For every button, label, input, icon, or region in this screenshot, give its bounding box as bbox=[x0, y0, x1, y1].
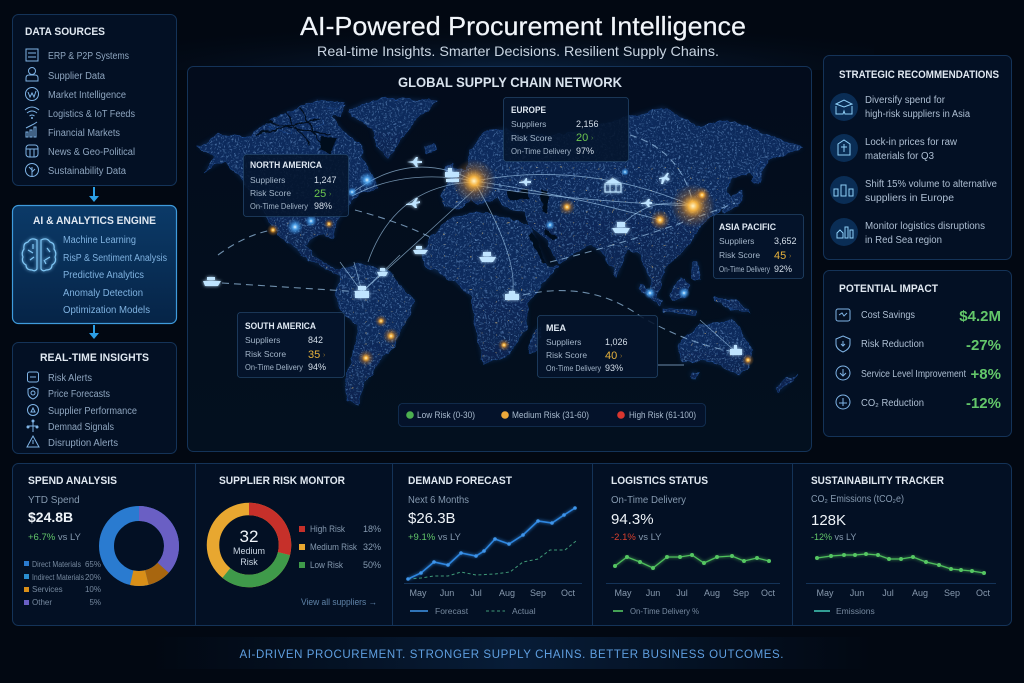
axis labels: Oct bbox=[976, 588, 990, 598]
callout: south america: 35 bbox=[308, 349, 320, 361]
list: engine capabilities: RisP & Sentiment Analysis bbox=[63, 253, 167, 264]
legend: risk levels: Low Risk (0-30) bbox=[417, 410, 475, 420]
callout: MEA: 40 bbox=[605, 350, 617, 362]
inland seas and channels bbox=[318, 136, 556, 262]
item: disruption alerts: Disruption Alerts bbox=[48, 438, 118, 449]
recommendation: lock-in: materials for Q3 bbox=[865, 151, 934, 162]
legend: risk breakdown: 32% bbox=[363, 542, 381, 552]
legend: spend categories: 20% bbox=[85, 573, 101, 582]
heading: insights: REAL-TIME INSIGHTS bbox=[40, 352, 149, 364]
callout: north america: 98% bbox=[314, 201, 332, 211]
chart: risk donut bbox=[213, 509, 285, 581]
callout: europe: EUROPE bbox=[511, 105, 546, 116]
item: news and geopolitical: News & Geo-Political bbox=[48, 147, 135, 158]
callout: south america: 842 bbox=[308, 335, 323, 345]
axis labels: May bbox=[409, 588, 427, 598]
link: view all suppliers: View all suppliers → bbox=[301, 597, 377, 607]
axis labels: Oct bbox=[561, 588, 575, 598]
card: demand forecast bbox=[404, 475, 582, 616]
callout: europe: Suppliers bbox=[511, 119, 546, 129]
callout: europe: 20 bbox=[576, 132, 588, 144]
panel: real-time insights bbox=[12, 342, 176, 454]
item: logistics and IoT: Logistics & IoT Feeds bbox=[48, 109, 135, 120]
callout: MEA: MEA bbox=[546, 323, 566, 334]
axis labels: Sep bbox=[944, 588, 960, 598]
axis labels: Aug bbox=[704, 588, 720, 598]
arrow: engine to insights bbox=[89, 325, 99, 339]
icon: brain bbox=[22, 239, 56, 271]
icon: warehouse bbox=[605, 178, 621, 192]
item: supplier data: Supplier Data bbox=[48, 71, 105, 82]
callout: asia pacific bbox=[714, 214, 804, 278]
card: spend analysis bbox=[24, 475, 172, 607]
item: price forecasts: Price Forecasts bbox=[48, 389, 110, 400]
callout: MEA: On-Time Delivery bbox=[546, 363, 602, 373]
axis labels bbox=[614, 588, 775, 598]
card: logistics status: -2.1% vs LY bbox=[611, 532, 662, 543]
item: logistics and IoT bbox=[25, 107, 135, 120]
card: demand forecast: Next 6 Months bbox=[408, 495, 469, 506]
card: sustainability tracker: -12% vs LY bbox=[811, 532, 856, 542]
axis labels: Jul bbox=[882, 588, 894, 598]
shipping and air routes bbox=[218, 135, 736, 352]
callout: asia pacific: Suppliers bbox=[719, 236, 754, 246]
callout: MEA: Risk Score bbox=[546, 350, 587, 360]
card: sustainability tracker: 128K bbox=[811, 512, 846, 529]
card: demand forecast: $26.3B bbox=[408, 510, 456, 527]
heading: recommendations: STRATEGIC RECOMMENDATIONS bbox=[839, 69, 999, 81]
metric: cost savings: $4.2M bbox=[959, 308, 1001, 325]
item: financial markets: Financial Markets bbox=[48, 128, 120, 139]
callout: north america: 1,247 bbox=[314, 175, 337, 185]
legend: emissions: Emissions bbox=[836, 606, 875, 616]
icons: ships and depots bbox=[203, 168, 742, 355]
item: market intelligence: Market Intelligence bbox=[48, 90, 126, 101]
item: price forecasts bbox=[28, 387, 110, 400]
item: demand signals bbox=[26, 420, 114, 433]
item: risk alerts bbox=[28, 372, 92, 384]
risk score label: Risk bbox=[240, 557, 258, 567]
callout: north america: NORTH AMERICA bbox=[250, 160, 322, 171]
metric: risk reduction bbox=[836, 336, 1001, 354]
chart: on-time delivery line bbox=[606, 553, 780, 584]
axis labels: Oct bbox=[761, 588, 775, 598]
callout: MEA bbox=[538, 316, 684, 378]
heading: impact: POTENTIAL IMPACT bbox=[839, 283, 938, 295]
card: logistics status: LOGISTICS STATUS bbox=[611, 475, 708, 487]
panel: global supply chain network bbox=[188, 66, 812, 452]
chart: emissions line bbox=[806, 552, 996, 584]
risk score label bbox=[233, 527, 265, 567]
legend: risk levels bbox=[398, 404, 706, 426]
item: news and geopolitical bbox=[26, 145, 135, 158]
legend: spend categories: Services bbox=[32, 585, 63, 594]
callout: south america bbox=[238, 312, 344, 378]
recommendation: monitor logistics: Monitor logistics disruptions bbox=[865, 221, 985, 232]
card: demand forecast: DEMAND FORECAST bbox=[408, 475, 512, 487]
item: risk alerts: Risk Alerts bbox=[48, 373, 92, 384]
panel: AI and analytics engine bbox=[12, 206, 176, 324]
heading: map title: GLOBAL SUPPLY CHAIN NETWORK bbox=[398, 74, 622, 90]
list: engine capabilities bbox=[63, 235, 167, 316]
panel: potential impact bbox=[824, 270, 1012, 436]
metric: service level improvement: Service Level Improvement bbox=[861, 369, 966, 380]
callout: asia pacific: › bbox=[789, 253, 792, 260]
legend: spend categories: 65% bbox=[85, 560, 101, 569]
metric: cost savings bbox=[836, 308, 1001, 325]
legend: spend categories: Direct Materials bbox=[32, 560, 81, 569]
legend: risk breakdown: 18% bbox=[363, 524, 381, 534]
callout: north america: Risk Score bbox=[250, 188, 291, 198]
subtitle: Real-time Insights. Smarter Decisions. Resilient Supply Chains. bbox=[317, 43, 719, 59]
recommendation: lock-in: Lock-in prices for raw bbox=[865, 137, 958, 148]
legend: spend categories bbox=[24, 560, 101, 607]
callout: south america: On-Time Delivery bbox=[245, 362, 304, 372]
card: demand forecast: +9.1% vs LY bbox=[408, 532, 462, 543]
axis labels: Aug bbox=[912, 588, 928, 598]
callout: north america: › bbox=[329, 191, 332, 198]
legend: logistics: On-Time Delivery % bbox=[630, 606, 699, 616]
legend: risk breakdown: High Risk bbox=[310, 524, 345, 534]
legend: risk levels: High Risk (61-100) bbox=[629, 410, 696, 420]
title bbox=[300, 11, 746, 59]
axis labels: Jun bbox=[646, 588, 660, 598]
metric: CO2 reduction bbox=[836, 395, 1001, 412]
icons: planes bbox=[406, 157, 670, 208]
card: spend analysis: YTD Spend bbox=[28, 495, 80, 506]
card: spend analysis: $24.8B bbox=[28, 509, 73, 525]
list: engine capabilities: Optimization Models bbox=[63, 305, 150, 316]
recommendation: diversify: high-risk suppliers in Asia bbox=[865, 109, 970, 120]
item: disruption alerts bbox=[27, 436, 118, 449]
metric: cost savings: Cost Savings bbox=[861, 310, 915, 321]
legend: risk breakdown: Low Risk bbox=[310, 560, 343, 570]
legend: risk levels: Medium Risk (31-60) bbox=[512, 410, 589, 420]
recommendation: diversify: Diversify spend for bbox=[865, 95, 946, 106]
callout: south america: 94% bbox=[308, 362, 326, 372]
axis labels: Jun bbox=[850, 588, 864, 598]
item: ERP: ERP & P2P Systems bbox=[48, 51, 129, 62]
recommendation: shift volume: suppliers in Europe bbox=[865, 193, 954, 204]
card: sustainability tracker: CO₂ Emissions (tCO₂e) bbox=[811, 494, 904, 505]
panel: strategic recommendations bbox=[824, 56, 1012, 260]
item: financial markets bbox=[26, 122, 120, 139]
callout: europe bbox=[504, 98, 628, 162]
recommendation: diversify bbox=[830, 93, 970, 121]
recommendation: monitor logistics: in Red Sea region bbox=[865, 235, 942, 246]
card: spend analysis: SPEND ANALYSIS bbox=[28, 475, 117, 487]
metric: CO2 reduction: -12% bbox=[966, 395, 1001, 412]
metric: service level improvement bbox=[836, 366, 1001, 383]
chart: demand line bbox=[404, 506, 582, 584]
metric: service level improvement: +8% bbox=[971, 366, 1001, 383]
card: supplier risk monitor: SUPPLIER RISK MONTOR bbox=[219, 475, 345, 487]
title: AI-Powered Procurement Intelligence bbox=[300, 11, 746, 41]
card: sustainability tracker: SUSTAINABILITY TRACKER bbox=[811, 475, 944, 487]
world map bbox=[196, 96, 803, 406]
metric: CO2 reduction: CO₂ Reduction bbox=[861, 398, 924, 409]
arrow: sources to engine bbox=[89, 187, 99, 202]
callout: south america: › bbox=[323, 352, 326, 359]
axis labels: Sep bbox=[530, 588, 546, 598]
axis labels: Jul bbox=[470, 588, 482, 598]
callout: asia pacific: ASIA PACIFIC bbox=[719, 222, 776, 233]
axis labels: Sep bbox=[733, 588, 749, 598]
callout: north america: 25 bbox=[314, 188, 326, 200]
item: market intelligence bbox=[26, 88, 126, 101]
callout: north america: Suppliers bbox=[250, 175, 285, 185]
risk score label: Medium bbox=[233, 546, 265, 556]
card: spend analysis: +6.7% vs LY bbox=[28, 532, 82, 543]
legend: demand bbox=[410, 606, 536, 616]
callout: asia pacific: On-Time Delivery bbox=[719, 264, 771, 274]
recommendation: lock-in bbox=[830, 134, 958, 162]
callout: asia pacific: 3,652 bbox=[774, 236, 797, 246]
callout: MEA: Suppliers bbox=[546, 337, 581, 347]
callout: south america: SOUTH AMERICA bbox=[245, 321, 316, 332]
legend: risk breakdown bbox=[299, 524, 381, 570]
metric: risk reduction: Risk Reduction bbox=[861, 339, 924, 350]
recommendation: shift volume: Shift 15% volume to alternative bbox=[865, 179, 997, 190]
risk score label: 32 bbox=[240, 527, 258, 546]
callout: europe: Risk Score bbox=[511, 133, 552, 143]
legend: spend categories: 5% bbox=[89, 598, 101, 607]
list: engine capabilities: Predictive Analytics bbox=[63, 270, 144, 281]
callout: europe: 97% bbox=[576, 146, 594, 156]
legend: spend categories: 10% bbox=[85, 585, 101, 594]
item: ERP bbox=[26, 49, 129, 62]
callout: north america: On-Time Delivery bbox=[250, 201, 309, 211]
callout: europe: On-Time Delivery bbox=[511, 146, 572, 156]
item: sustainability data bbox=[26, 164, 126, 177]
callout: MEA: 93% bbox=[605, 363, 623, 373]
callout: europe: › bbox=[591, 135, 594, 142]
item: supplier data bbox=[26, 68, 105, 82]
recommendation: monitor logistics bbox=[830, 218, 985, 246]
axis labels: Jul bbox=[676, 588, 688, 598]
legend: spend categories: Indirect Materials bbox=[32, 573, 84, 582]
footer banner bbox=[150, 637, 874, 669]
card: logistics status: 94.3% bbox=[611, 511, 654, 528]
legend: risk breakdown: Medium Risk bbox=[310, 542, 357, 552]
item: supplier performance bbox=[28, 404, 137, 417]
axis labels: Aug bbox=[499, 588, 515, 598]
heading: data sources: DATA SOURCES bbox=[25, 26, 105, 38]
axis labels bbox=[409, 588, 575, 598]
card: logistics status: On-Time Delivery bbox=[611, 495, 686, 506]
callout: north america bbox=[244, 154, 348, 216]
heading: engine: AI & ANALYTICS ENGINE bbox=[33, 215, 156, 227]
footer banner: AI-DRIVEN PROCUREMENT. STRONGER SUPPLY CHAINS. BETTER BUSINESS OUTCOMES. bbox=[240, 649, 784, 661]
legend: demand: Actual bbox=[512, 606, 536, 616]
callout: MEA: 1,026 bbox=[605, 337, 628, 347]
callout: south america: Risk Score bbox=[245, 349, 286, 359]
panel: data sources bbox=[12, 14, 176, 186]
network hubs bbox=[267, 159, 754, 366]
card: logistics status bbox=[606, 475, 780, 616]
card: supplier risk monitor bbox=[213, 475, 381, 607]
callout: europe: 2,156 bbox=[576, 119, 599, 129]
axis labels: Jun bbox=[440, 588, 454, 598]
legend: spend categories: Other bbox=[32, 598, 52, 607]
item: demand signals: Demnad Signals bbox=[48, 422, 114, 433]
callout: asia pacific: Risk Score bbox=[719, 250, 760, 260]
list: engine capabilities: Machine Learning bbox=[63, 235, 136, 246]
recommendation: shift volume bbox=[830, 176, 997, 204]
legend: demand: Forecast bbox=[435, 606, 469, 616]
axis labels: May bbox=[816, 588, 834, 598]
list: engine capabilities: Anomaly Detection bbox=[63, 288, 143, 299]
chart: spend donut bbox=[106, 514, 172, 578]
callout: MEA: › bbox=[620, 353, 623, 360]
callout: south america: Suppliers bbox=[245, 335, 280, 345]
axis labels: May bbox=[614, 588, 632, 598]
metric: risk reduction: -27% bbox=[966, 337, 1001, 354]
legend: risk breakdown: 50% bbox=[363, 560, 381, 570]
axis labels bbox=[816, 588, 990, 598]
callout: asia pacific: 45 bbox=[774, 250, 786, 262]
item: sustainability data: Sustainability Data bbox=[48, 166, 126, 177]
item: supplier performance: Supplier Performance bbox=[48, 406, 137, 417]
card: sustainability tracker bbox=[806, 475, 996, 616]
legend: emissions bbox=[814, 606, 875, 616]
panel: bottom dashboard bbox=[12, 464, 1012, 626]
callout: asia pacific: 92% bbox=[774, 264, 792, 274]
